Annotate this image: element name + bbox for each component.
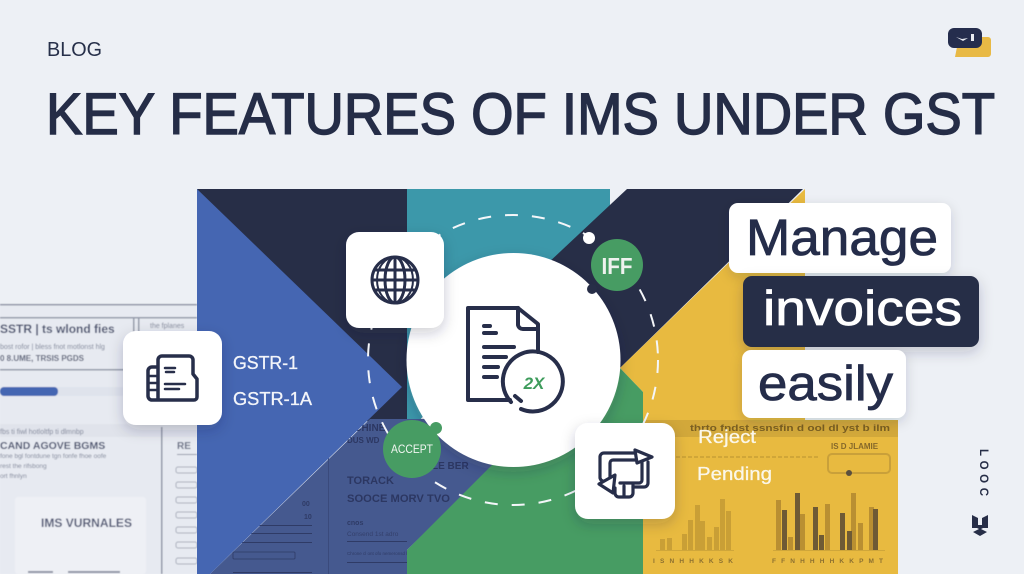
badge: IFF: IFF xyxy=(602,253,632,279)
panel: dark top-left triangle xyxy=(197,189,407,425)
label: GSTR-1A: GSTR-1A xyxy=(233,389,312,409)
panel: background document mockup: 0 8.UME, TRSIS PGDS xyxy=(0,354,85,363)
panel: muted blue report section: DUS WD xyxy=(347,436,380,445)
callout: invoices xyxy=(743,276,979,347)
panel: muted blue report section: Chrone cl ont ofo nemeronsd hono xyxy=(347,551,417,556)
icon: brand logo with folder xyxy=(948,28,991,57)
icon: arrows frame xyxy=(599,450,652,497)
panel: background document mockup: CAND AGOVE BGMS xyxy=(0,440,105,452)
panel: muted blue report section: TORACK xyxy=(347,475,394,487)
panel: muted blue report section: cnos xyxy=(347,520,363,527)
panel: background document mockup: ort fhnlyn xyxy=(0,473,27,480)
chart: right bar chart xyxy=(772,493,885,565)
panel: background document mockup xyxy=(0,304,197,574)
panel: background document mockup: IMS VURNALES xyxy=(41,518,132,530)
callout: easily xyxy=(742,350,906,418)
icon: files xyxy=(148,356,197,400)
magnifier badge text: 2X xyxy=(523,374,546,393)
chart: right bar chart: F F N H H H H K K P M T xyxy=(772,558,883,565)
callout: Manage: Manage xyxy=(746,209,938,266)
panel: yellow section xyxy=(620,189,805,425)
panel: muted blue report section: BCHINE xyxy=(347,423,386,434)
callout: easily: easily xyxy=(758,357,894,411)
blog label: BLOG xyxy=(47,39,102,61)
panel: blue triangle xyxy=(197,189,402,574)
central white circle xyxy=(406,253,620,467)
icon: document with magnifier xyxy=(468,308,563,411)
panel: muted blue report section: ZE BER xyxy=(432,461,469,472)
panel: background document mockup: bost rofor | bless fnot motlonst hlg xyxy=(0,344,105,351)
label: GSTR-1: GSTR-1 xyxy=(233,353,298,373)
panel: muted blue report section: Consend 1st adro xyxy=(347,531,399,538)
panel: background document mockup: rest the rifsbong xyxy=(0,463,47,470)
panel: muted blue report section xyxy=(210,419,510,574)
icon: small dot on orbit xyxy=(583,232,595,244)
label: Reject: Reject xyxy=(698,427,756,447)
panel: background document mockup: fone bgl fontdune tgn fonfe fhoe oofe xyxy=(0,453,107,460)
icon: globe xyxy=(372,257,418,303)
panel: background document mockup: RE xyxy=(177,441,191,452)
callout: Manage xyxy=(729,203,951,273)
badge: ACCEPT: ACCEPT xyxy=(391,442,434,456)
badge: IFF xyxy=(587,239,643,294)
badge: ACCEPT xyxy=(383,420,442,478)
panel: dark top-right section xyxy=(530,189,803,368)
panel: muted blue report section: 10 xyxy=(304,514,312,521)
card: file icon xyxy=(123,331,222,425)
chart: left bar chart: I S N H H K K S K xyxy=(653,558,733,565)
panel: yellow report section: IS D JLAMIE xyxy=(831,442,879,451)
panel: green section xyxy=(407,360,643,574)
panel: background document mockup: SSTR | ts wlond fies xyxy=(0,322,115,336)
icon: bottom-right brand mark xyxy=(972,515,988,536)
panel: background document mockup: fbs ti fiwl hotloltfp ti dlmnbp xyxy=(0,429,84,436)
panel: muted blue report section: SOOCE MORV TVO xyxy=(347,493,450,505)
panel: background document mockup: the fplanes xyxy=(150,323,185,330)
dashed orbit ring xyxy=(368,215,658,505)
panel: muted blue report section: 00 xyxy=(302,501,310,508)
card: workflow icon xyxy=(575,423,675,519)
chart: left bar chart xyxy=(653,499,734,565)
card: globe icon xyxy=(346,232,444,328)
panel: yellow report section xyxy=(643,420,898,574)
vertical brand text: LOOC xyxy=(977,449,989,496)
panel: yellow report section: thrto fndst ssnsfin d ool dl yst b ilm xyxy=(690,423,890,433)
label: Pending: Pending xyxy=(697,464,772,484)
panel: teal section xyxy=(407,189,610,420)
callout: invoices: invoices xyxy=(763,282,962,336)
